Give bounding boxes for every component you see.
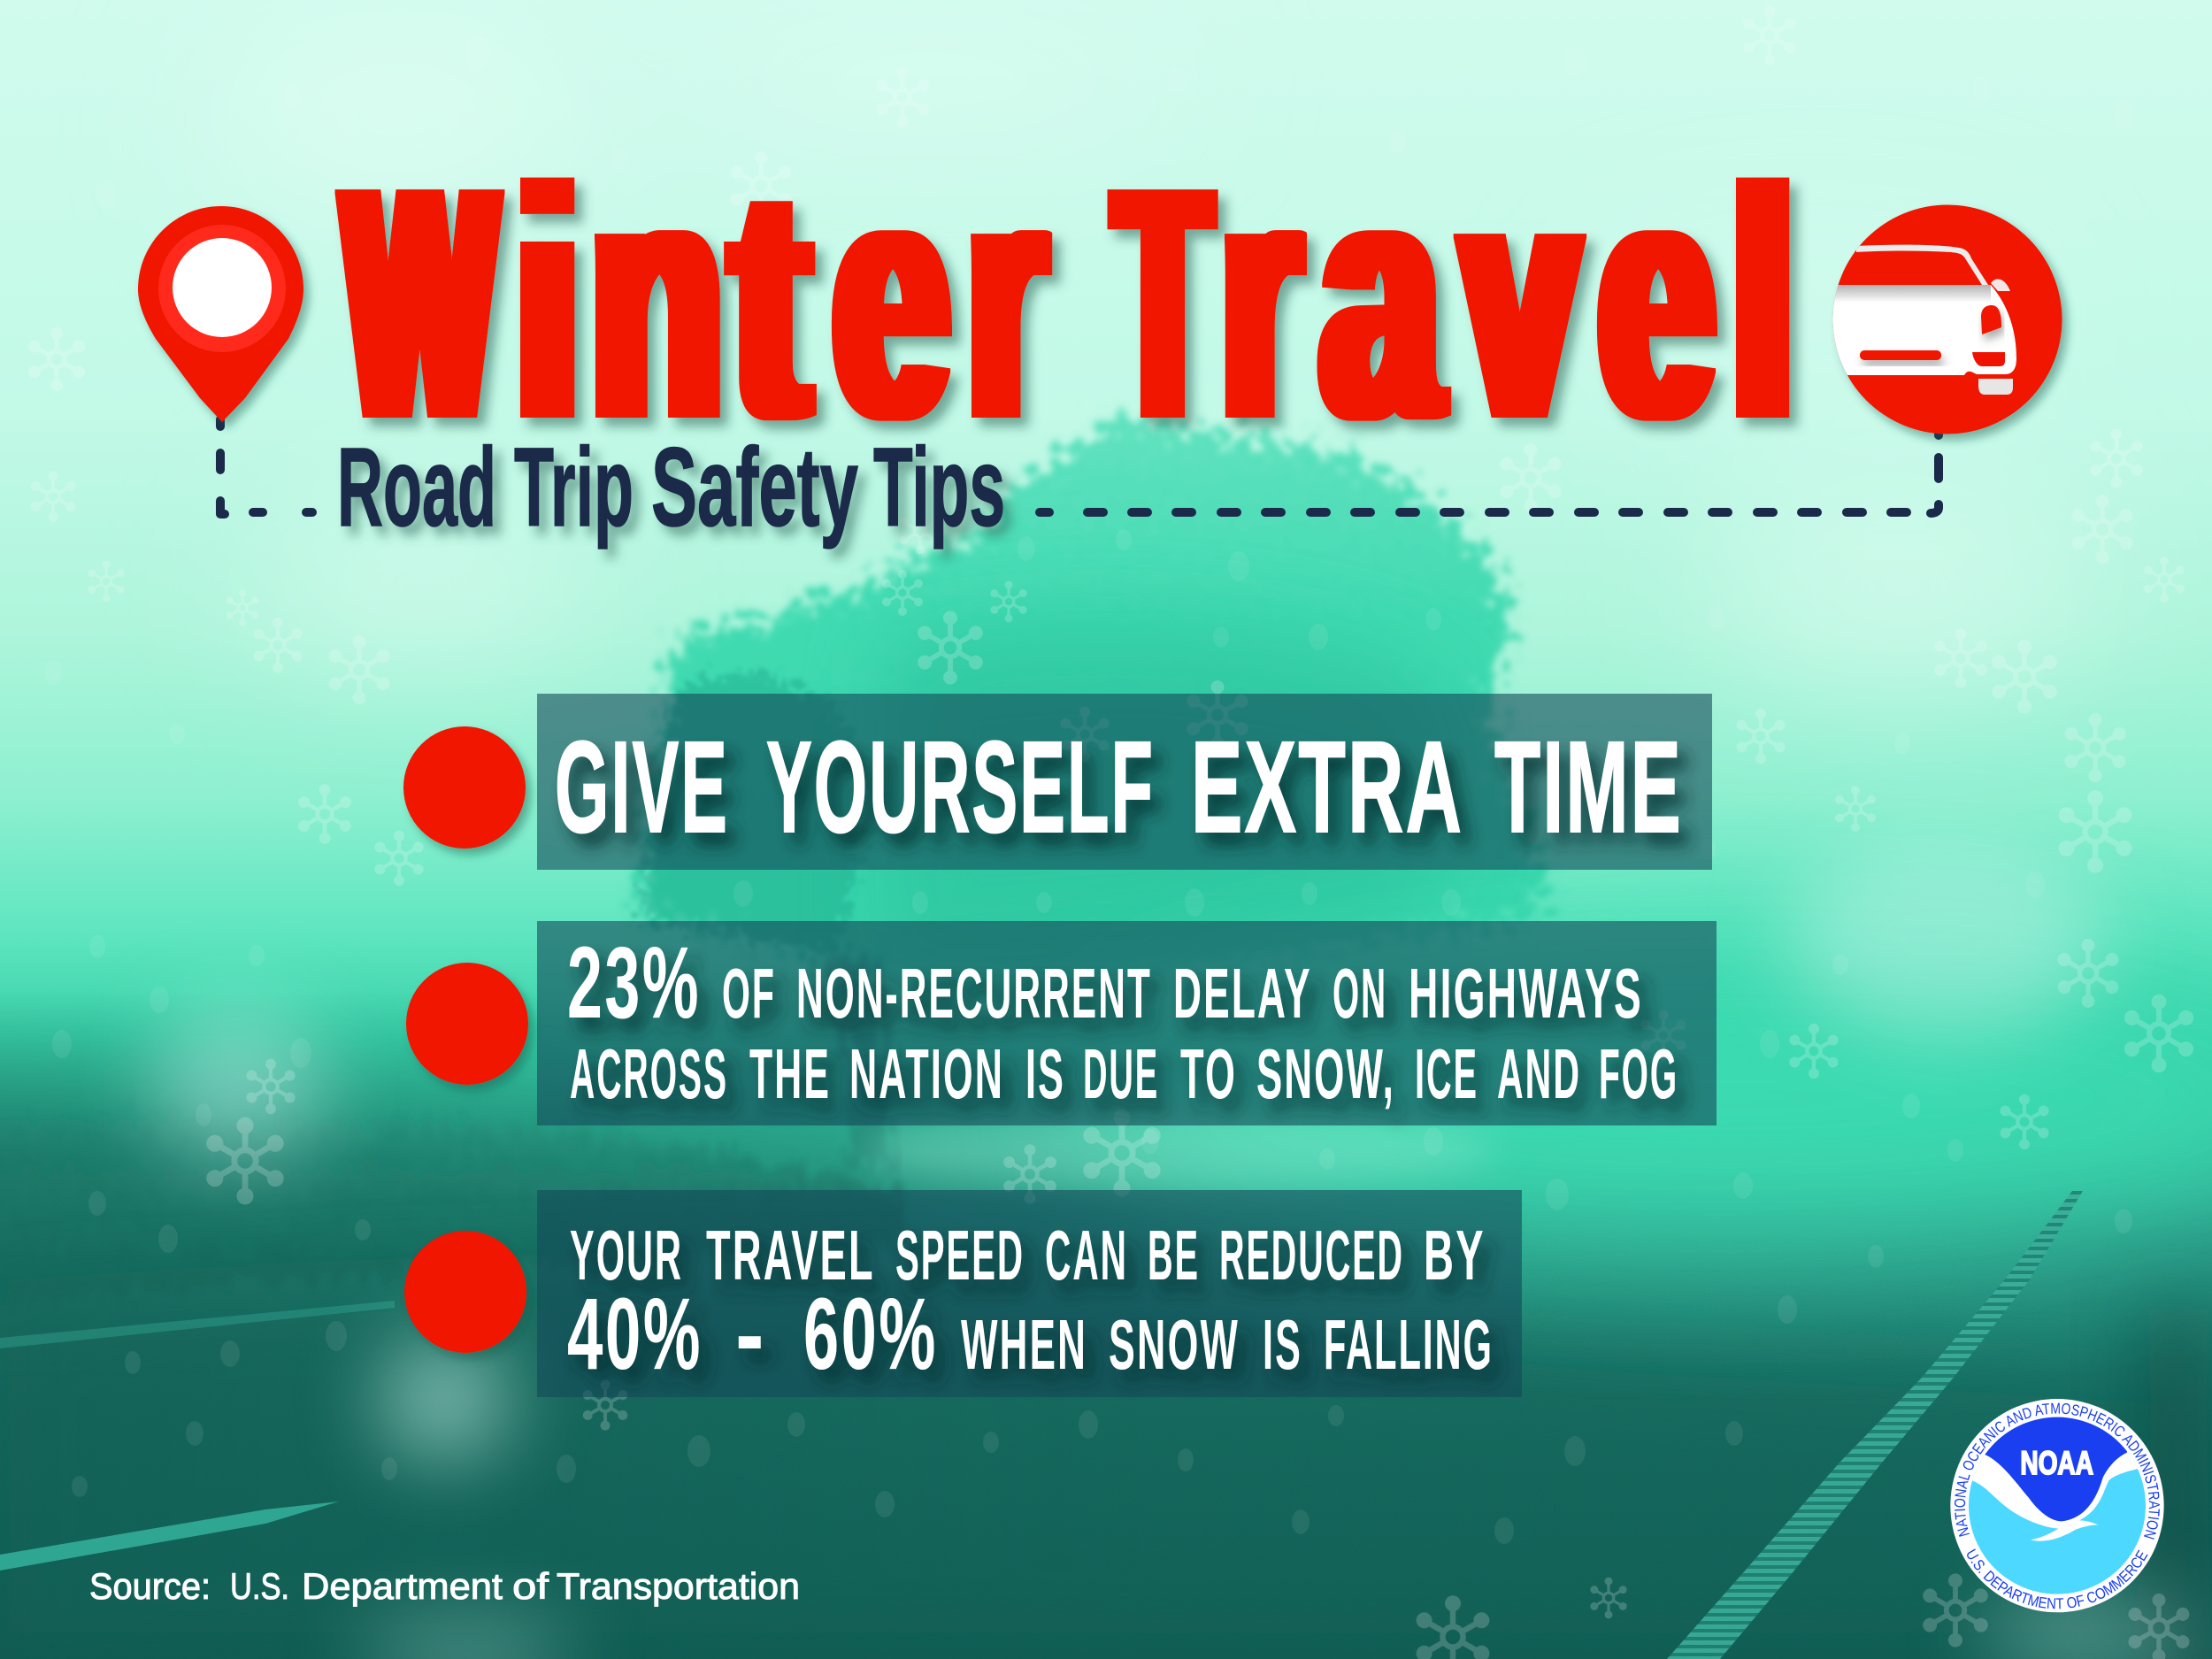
text: 23% of non-recurrent delay on highways: ON <box>1333 954 1387 1033</box>
background: rumble strip on right edge <box>1667 1191 2083 1659</box>
title: winter travel: t <box>733 121 808 486</box>
text: 40% - 60% when snow is falling: 40% <box>567 1278 703 1391</box>
text: across the nation is due to snow, ice and fog: NATION <box>849 1034 1004 1113</box>
dashed route line <box>220 419 1939 514</box>
logo: NOAA: U.S. DEPARTMENT OF COMMERCE <box>1967 1548 2148 1609</box>
subtitle: road trip safety tips: Road <box>337 425 496 549</box>
text: 40% - 60% when snow is falling: FALLING <box>1324 1305 1494 1384</box>
text: across the nation is due to snow, ice and fog: TO <box>1180 1034 1237 1113</box>
background: road surface <box>0 1279 2212 1659</box>
title: winter travel: n <box>592 107 722 488</box>
icon: map pin <box>138 206 303 422</box>
heading: give yourself extra time: GIVE <box>555 715 729 860</box>
title: winter travel: i <box>516 121 579 486</box>
text: your travel speed can be reduced by: CAN <box>1045 1216 1128 1294</box>
title: winter travel: a <box>1323 107 1440 488</box>
source line: Department <box>302 1565 503 1607</box>
text: 40% - 60% when snow is falling: WHEN <box>961 1305 1087 1384</box>
text: your travel speed can be reduced by: BE <box>1148 1216 1200 1294</box>
bullet circle 2 <box>406 963 528 1085</box>
panel: travel speed reduced <box>404 1190 1522 1397</box>
heading: give yourself extra time: EXTRA <box>1191 715 1461 860</box>
text: 23% of non-recurrent delay on highways: HIGHWAYS <box>1409 954 1643 1033</box>
logo: NOAA <box>1950 1399 2164 1612</box>
source line: U.S. <box>230 1565 289 1607</box>
background: bright fog glows in the upper sky <box>204 18 2097 699</box>
logo: NOAA: NATIONAL OCEANIC AND ATMOSPHERIC ADMINISTRATION <box>1954 1403 2160 1540</box>
heading: give yourself extra time: TIME <box>1494 715 1683 860</box>
source line: Source: <box>89 1565 211 1607</box>
text: across the nation is due to snow, ice and fog: SNOW, <box>1256 1034 1395 1113</box>
text: across the nation is due to snow, ice and fog: IS <box>1025 1034 1065 1113</box>
text: your travel speed can be reduced by: BY <box>1424 1216 1486 1294</box>
text: 23% of non-recurrent delay on highways: OF <box>722 954 776 1033</box>
background: right road shoulder <box>2124 1310 2212 1659</box>
text: 23% of non-recurrent delay on highways: DELAY <box>1173 954 1311 1033</box>
title: winter travel: v <box>1464 107 1578 488</box>
subtitle: road trip safety tips: Tips <box>873 425 1005 549</box>
background: fog light glows <box>150 841 2194 1659</box>
car wheel <box>1978 379 2013 395</box>
logo: NOAA: NOAA <box>2020 1445 2093 1481</box>
panel: give yourself extra time <box>403 694 1712 870</box>
text: 40% - 60% when snow is falling: SNOW <box>1109 1305 1240 1384</box>
heading: give yourself extra time: YOURSELF <box>766 715 1155 860</box>
title: winter travel: l <box>1732 121 1793 486</box>
title: winter travel: r <box>1224 107 1298 488</box>
car headlight <box>1981 305 2001 334</box>
text: 40% - 60% when snow is falling: 60% <box>803 1278 938 1391</box>
text: your travel speed can be reduced by: TRAVEL <box>706 1216 874 1294</box>
text: 23% of non-recurrent delay on highways: NON-RECURRENT <box>796 954 1152 1033</box>
bullet circle 1 <box>403 726 526 849</box>
text: across the nation is due to snow, ice and fog: ICE <box>1415 1034 1479 1113</box>
icon: car in red circle <box>1823 205 2062 434</box>
source line: of <box>512 1565 549 1607</box>
car mirror <box>1991 279 2010 291</box>
background: grey pale streak across road <box>858 1110 1495 1190</box>
car grille <box>1860 350 1941 360</box>
text: 40% - 60% when snow is falling: IS <box>1263 1305 1302 1384</box>
background: right fog bank <box>1088 947 2212 1248</box>
text: your travel speed can be reduced by: REDUCED <box>1219 1216 1404 1294</box>
title: winter travel: W <box>346 121 495 486</box>
text: your travel speed can be reduced by: YOUR <box>570 1216 683 1294</box>
text: 23% of non-recurrent delay on highways: 23% <box>567 926 701 1040</box>
text: across the nation is due to snow, ice and fog: ACROSS <box>570 1034 728 1113</box>
title: winter travel: e <box>835 107 948 488</box>
background: roadside grass <box>0 1113 920 1305</box>
background: road grain texture <box>0 1257 2210 1659</box>
panel: 23 percent delay <box>406 921 1717 1125</box>
title: winter travel: r <box>970 107 1044 488</box>
car windshield outline <box>1856 245 1988 285</box>
text: 40% - 60% when snow is falling: - <box>735 1278 767 1391</box>
subtitle: road trip safety tips: Safety <box>651 425 858 549</box>
bullet circle 3 <box>404 1231 526 1353</box>
background: left side darkening mist <box>0 1010 925 1494</box>
background: tree canopy in fog <box>637 416 1543 1168</box>
text: across the nation is due to snow, ice and fog: DUE <box>1083 1034 1159 1113</box>
source line: Transportation <box>557 1565 800 1607</box>
background: lower left dash <box>0 1502 339 1571</box>
text: across the nation is due to snow, ice and fog: AND <box>1497 1034 1581 1113</box>
title: winter travel: T <box>1118 121 1209 486</box>
car body <box>1823 285 2016 375</box>
text: across the nation is due to snow, ice and fog: THE <box>749 1034 831 1113</box>
car fog lamp <box>1972 352 2005 366</box>
title: winter travel: e <box>1601 107 1713 488</box>
text: your travel speed can be reduced by: SPEED <box>895 1216 1025 1294</box>
subtitle: road trip safety tips: Trip <box>514 425 634 549</box>
background: left lane line <box>0 1301 395 1348</box>
panel: 23 percent delay: FOG <box>1599 1034 1678 1113</box>
